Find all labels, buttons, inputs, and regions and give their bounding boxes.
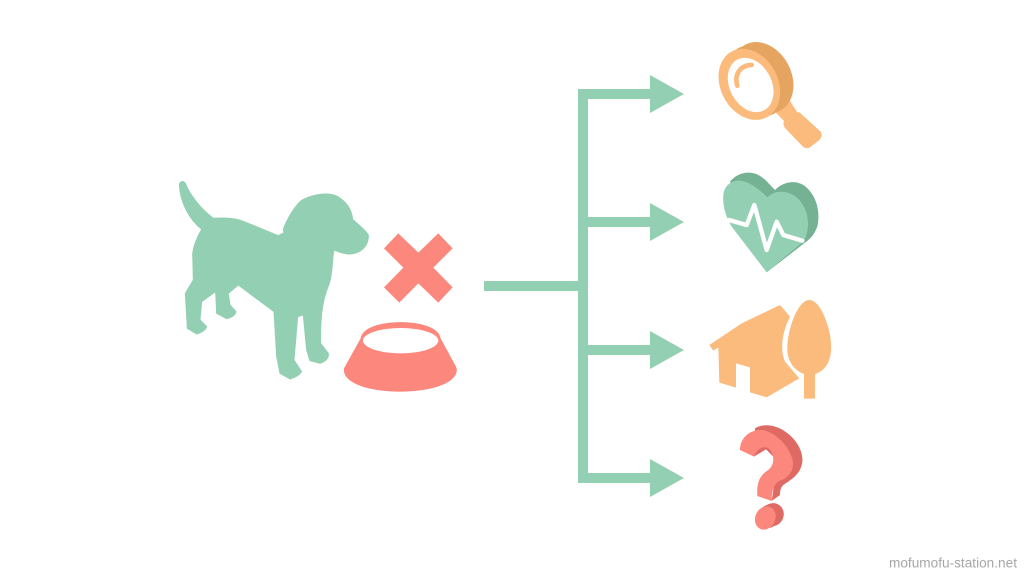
icon: question mark: [740, 425, 802, 533]
icon: food bowl: [344, 322, 457, 392]
arrow: to question mark: [578, 459, 684, 497]
icon: house and tree: [709, 300, 831, 399]
icon: dog silhouette: [179, 181, 368, 379]
arrow: to house: [588, 331, 684, 369]
icon: heart with pulse: [723, 173, 818, 272]
arrow: branching tree of four arrows: [484, 75, 684, 497]
icon: magnifying glass: [706, 31, 822, 148]
arrow: to magnifier: [578, 75, 684, 113]
arrow: to heart: [588, 203, 684, 241]
icon: red cross: [384, 233, 453, 303]
watermark text: mofumofu-station.net: [889, 556, 1017, 570]
